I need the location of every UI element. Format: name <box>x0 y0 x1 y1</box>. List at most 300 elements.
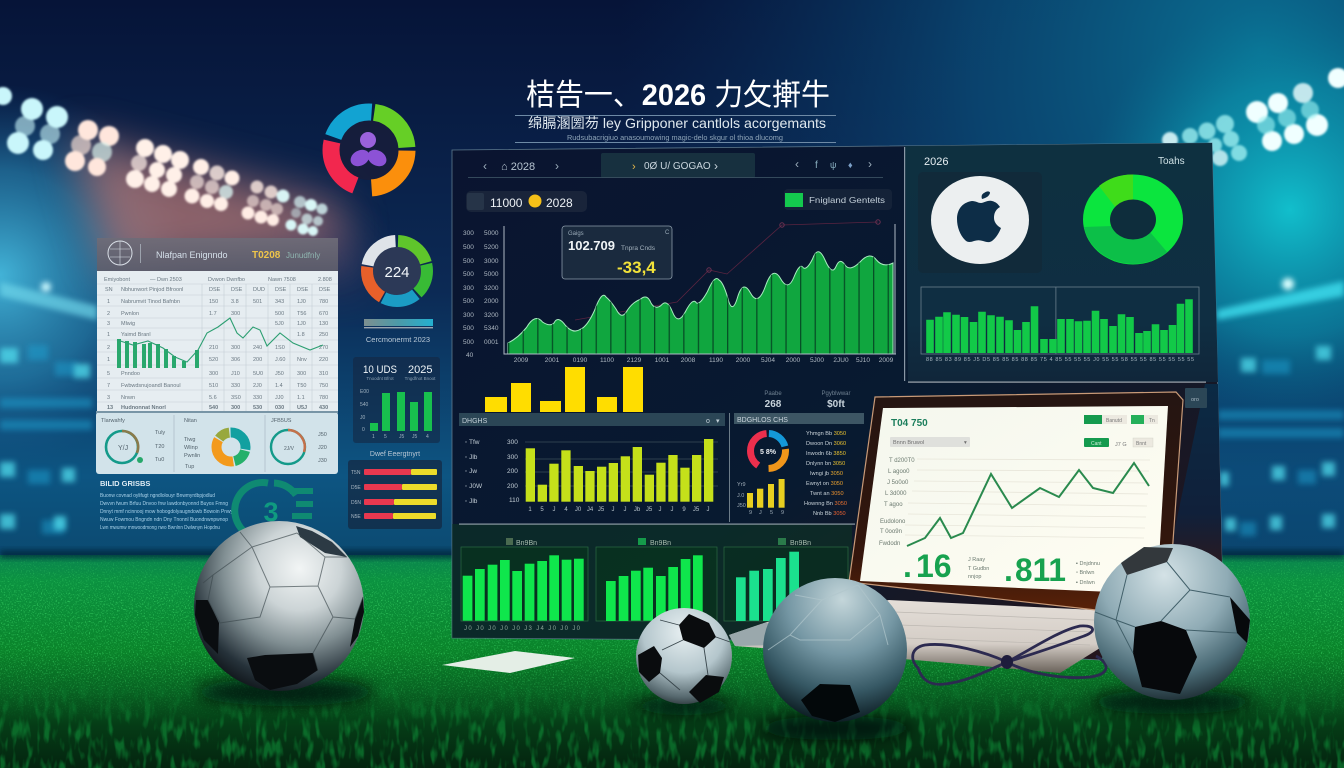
chart: main green area chart: 1190 <box>709 357 723 364</box>
stats: small labels: 268 <box>765 399 782 410</box>
laptop screen text: J7 G <box>1115 442 1127 448</box>
text block: lower left notes: BILID GRISBS <box>100 479 150 488</box>
panel: match table: 300 <box>209 371 218 377</box>
panel: donut and list: Twnt an 3050 <box>810 491 844 497</box>
chart: yellow-green bars panel: ◦ Jlb <box>465 498 478 505</box>
panel: small green bars: Tnoodnt Bfrot <box>366 376 394 381</box>
panel: match table: JFB5US <box>271 418 292 424</box>
callout: value tooltip: Tnpra Cnds <box>621 245 656 252</box>
panel: match table: 330 <box>231 383 240 389</box>
panel: match table: 3 <box>107 395 110 401</box>
panel: match table: Tuly <box>155 430 165 436</box>
panel: match table: 5U0 <box>253 371 263 377</box>
dashboard header tabs: › <box>555 159 559 173</box>
panel: match table: Junudfnly <box>286 251 320 260</box>
panel: match table: 780 <box>319 299 328 305</box>
text block: lower left notes: Buonw covnad oylifugt ngndlolouyr Bnwmyrdbpjodlud <box>100 493 215 499</box>
laptop screen text: T04 750 <box>891 418 928 429</box>
donut: green share <box>1083 174 1183 264</box>
chart: main green area chart: 2008 <box>681 357 696 364</box>
chart: yellow-green bars panel: J <box>624 507 626 513</box>
chart: yellow-green bars panel: J <box>670 507 674 513</box>
ball shadows <box>195 678 1254 740</box>
donut: 2024 gauge: 224 <box>384 264 410 281</box>
panel: match table: 150 <box>209 299 218 305</box>
chart: main green area chart: 300 <box>463 230 474 237</box>
panel: red-yellow progress bars <box>348 451 442 529</box>
donut: 2024 gauge <box>367 241 427 301</box>
chart: main green area chart <box>463 220 896 364</box>
panel: match table: T56 <box>297 311 306 317</box>
panel: match table: 330 <box>253 395 262 401</box>
panel: small green bars: 10 UDS <box>363 364 397 376</box>
panel: match table: J50 <box>275 371 284 377</box>
chart: yellow-green bars panel <box>459 413 725 513</box>
panel: match table: 220 <box>319 357 328 363</box>
stats: small labels: $0ft <box>827 399 846 410</box>
laptop screen text: T agoo <box>884 502 903 508</box>
progress bar with caption: Cercmonermt 2023 <box>366 335 430 344</box>
panel: match table: J50 <box>318 432 327 438</box>
panel: match table: Tlarwahfy <box>101 418 125 424</box>
panel: match table: 250 <box>319 332 328 338</box>
chart: main green area chart: 0001 <box>484 339 499 346</box>
chart: yellow-green bars panel: J <box>552 507 556 513</box>
panel: red-yellow progress bars: N5E <box>351 514 361 520</box>
laptop screen text: ▾ <box>964 440 967 446</box>
chart: yellow-green bars panel: 300 <box>507 454 518 461</box>
chart: main green area chart: 5000 <box>484 271 499 278</box>
chart: main green area chart: 5200 <box>484 244 499 251</box>
chart: yellow-green bars panel: 200 <box>507 468 518 475</box>
panel: match table: DSE <box>297 287 309 293</box>
text block: lower left notes: Dnnyt mmf ncinnooj mow hobogdolyaugndowb Bowoin Pnwy <box>100 509 233 515</box>
panel: small green bars: 540 <box>360 402 369 408</box>
chart: main green area chart: 2001 <box>545 357 560 364</box>
panel: match table: J30 <box>318 458 327 464</box>
chart: main green area chart: 3000 <box>484 258 499 265</box>
panel: small green bars: 1 <box>372 434 375 440</box>
legend: year pill: 11000 <box>490 196 523 210</box>
chart: yellow-green bars panel: 9 <box>682 507 686 513</box>
panel: match table: 520 <box>209 357 218 363</box>
panel: donut and list: Iwngi jb 3050 <box>810 471 843 477</box>
panel: match table: 1 <box>107 299 110 305</box>
chart: green bar strip <box>921 287 1199 363</box>
panel: donut and list: 5 <box>770 510 773 516</box>
panel: match table: 780 <box>319 395 328 401</box>
panel: donut and list: Inwodn 6b 3850 <box>806 451 846 457</box>
callout: value tooltip: C <box>665 230 670 236</box>
panel: match table: Emiyobont <box>104 277 130 283</box>
chart: yellow-green bars panel: J <box>612 507 614 513</box>
laptop screen text: L 3d000 <box>885 491 907 497</box>
panel: donut and list: Yr9 <box>737 482 746 488</box>
chart: main green area chart: 3200 <box>484 285 499 292</box>
progress bar with caption <box>364 319 433 344</box>
chart: main green area chart: 40 <box>466 352 474 359</box>
chart: yellow-green bars panel: J5 <box>646 507 653 513</box>
laptop screen text: Bnnt <box>1136 441 1147 447</box>
panel: match table: 300 <box>297 371 306 377</box>
chart: yellow-green bars panel: ▾ <box>716 418 720 425</box>
laptop screen text <box>879 415 1158 547</box>
panel: match table: DUD <box>253 287 265 293</box>
chart: yellow-green bars panel: Jb <box>634 507 641 513</box>
panel: donut and list: J50 <box>737 503 746 509</box>
panel: match table: 500 <box>275 311 284 317</box>
panel: match table: Nlafpan Enignndo <box>156 250 228 260</box>
panel: match table: 670 <box>319 311 328 317</box>
laptop screen text: T 0oo9n <box>880 529 902 535</box>
panel: match table: 270 <box>319 345 328 351</box>
panel: match table: 300 <box>231 311 240 317</box>
panel: match table: Tu0 <box>155 457 164 463</box>
chart: yellow-green bars panel: 1 <box>528 507 532 513</box>
panel: match table: Mlwig <box>121 321 135 327</box>
panel: match table: 343 <box>275 299 284 305</box>
chart: bottom green bars 1 <box>461 538 588 632</box>
laptop chart line <box>907 463 1149 546</box>
panel: match table: DSE <box>319 287 331 293</box>
panel: match table: JJ0 <box>275 395 284 401</box>
text block: lower left notes: Dwvvn fwum Brfuu Dnvoo fnw lawdonbyonnd Buyos Fmng <box>100 501 228 507</box>
panel: match table: Nabrumvit Tinod Bafnbn <box>121 299 180 305</box>
panel: match table: T50 <box>297 383 306 389</box>
panel: match table: 5J0 <box>275 321 284 327</box>
laptop screen text: Tn <box>1149 418 1155 424</box>
panel: match table: 1.4 <box>275 383 283 389</box>
chart: bottom green bars 3 <box>724 538 848 621</box>
laptop screen text: Eudolono <box>880 519 906 525</box>
panel: match table: 2 <box>107 311 110 317</box>
dashboard header tabs: f <box>815 160 818 171</box>
legend: year pill: 2028 <box>546 196 573 210</box>
panel: match table: 1.1 <box>297 395 305 401</box>
subtitle <box>515 115 836 143</box>
text block: lower left notes: Lwn mwumw mnwoodmong nwo Bwnlnn Dwlwnyn Hopdnu <box>100 525 220 531</box>
panel: donut and list: Yhmgn Bb 3050 <box>806 431 846 437</box>
chart: main green area chart: 2000 <box>736 357 751 364</box>
icon: large soccer ball centre <box>763 578 907 722</box>
panel: match table: 210 <box>209 345 218 351</box>
chart: green bar strip: 88 85 83 89 85 J5 D5 85 85 85 88 85 75 4 85 55 55 55 J0 55 55 58 55 55 85 55 55 55 55 <box>926 357 1194 363</box>
chart: main green area chart: 5J00 <box>810 357 824 364</box>
icon: soccer ball left <box>194 521 364 691</box>
panel: match table: Nnwn <box>121 395 135 401</box>
panel: small green bars: J5 <box>412 434 418 440</box>
icon: small soccer ball <box>636 608 732 704</box>
chart: yellow-green bars panel: J5 <box>693 507 700 513</box>
icon: white badge with apple <box>918 172 1042 273</box>
laptop key figures: nnjop <box>968 574 981 580</box>
panel: match table: 5 <box>107 371 110 377</box>
chart: yellow-green bars panel: 110 <box>509 497 520 504</box>
chart: yellow-green bars panel: J0 <box>575 507 582 513</box>
dashboard header tabs: › <box>868 157 872 171</box>
chart: main green area chart: 2000 <box>484 298 499 305</box>
panel: match table: 300 <box>231 345 240 351</box>
panel: match table: 2J0 <box>253 383 262 389</box>
callout: value tooltip: 102.709 <box>568 238 615 253</box>
panel: small green bars: E00 <box>360 389 369 395</box>
chart: main green area chart: 500 <box>463 244 474 251</box>
panel: red-yellow progress bars: D5N <box>351 500 361 506</box>
legend: year pill <box>466 191 587 212</box>
panel: match table: J10 <box>231 371 240 377</box>
laptop key figures <box>903 548 1100 588</box>
laptop screen text: Fwdodn <box>879 541 900 547</box>
panel: match table: 306 <box>231 357 240 363</box>
panel: match table: 5.6 <box>209 395 217 401</box>
chart: main green area chart: 5340 <box>484 325 499 332</box>
dashboard header tabs: ♦ <box>848 160 853 170</box>
panel: match table: Hudnonnat Nnorl <box>121 405 166 411</box>
chart: main green area chart: 5000 <box>484 230 499 237</box>
chart: bottom green bars 2 <box>596 538 717 621</box>
panel: match table: 1.8 <box>297 332 305 338</box>
panel: match table: Fwbwdsnujoandl Banoul <box>121 383 181 389</box>
stats: small labels <box>764 391 851 410</box>
chart: yellow-green bars panel: DHGHS <box>462 418 488 425</box>
laptop screen text: Bnnn Bruwol <box>893 440 924 446</box>
callout: value tooltip <box>562 226 672 279</box>
panel: match table: Y/J <box>118 445 128 452</box>
panel: match table: 3.8 <box>231 299 239 305</box>
title: 桔告一、2026 力攵搟牛 <box>526 79 830 112</box>
panel: match table: Dvwon Dwnfbo <box>208 277 245 283</box>
gauge: left <box>106 431 143 463</box>
panel: match table: Pwnlin <box>184 453 200 459</box>
panel: match table: 310 <box>319 371 328 377</box>
chart: main green area chart: 2129 <box>627 357 642 364</box>
chart: yellow-green bars panel: J5 <box>598 507 605 513</box>
dashboard header tabs: › <box>714 159 718 173</box>
laptop key figures: T Gudbn <box>968 566 989 572</box>
laptop screen text: L agoo0 <box>888 469 910 475</box>
laptop <box>729 392 1183 673</box>
panel: match table: 1S0 <box>275 345 285 351</box>
panel: small green bars <box>353 357 440 443</box>
panel: red-yellow progress bars: T5N <box>351 470 361 476</box>
panel: match table: T20 <box>155 444 164 450</box>
panel: donut and list: Hownng Bn 3050 <box>804 501 847 507</box>
panel: match table: DSE <box>275 287 287 293</box>
panel: main dashboard <box>452 143 1222 660</box>
panel: match table: 3S0 <box>231 395 241 401</box>
panel: match table: Pwnlon <box>121 311 139 317</box>
callout: value tooltip: Gaigs <box>568 231 584 237</box>
panel: match table: 130 <box>319 321 328 327</box>
laptop screen text: J 5o0o0 <box>887 480 909 486</box>
chart: yellow bars <box>485 367 643 412</box>
subtitle: 绵膈溷圐芴 ley Gripponer cantlols acorgemants <box>528 115 826 131</box>
panel: match table: Tup <box>185 464 194 470</box>
panel: small green bars: 2025 <box>408 364 432 376</box>
laptop key figures: 16 <box>916 548 952 584</box>
panel: match table: 13 <box>107 405 113 411</box>
grass field <box>0 550 1344 768</box>
panel: donut and list: BDGHLOS CHS <box>737 417 788 424</box>
panel: red-yellow progress bars: Dwef Eeergtnyrt <box>370 451 420 458</box>
icon: teal number badge: 3 <box>263 497 279 527</box>
chart: yellow-green bars panel: 200 <box>507 483 518 490</box>
panel: match table: 1 <box>107 357 110 363</box>
panel: match table: DSE <box>231 287 243 293</box>
icon: teal number badge <box>235 482 313 538</box>
chart: yellow-green bars panel: J4 <box>587 507 594 513</box>
laptop screen text: T d200T0 <box>889 458 915 464</box>
laptop key figures: ▪ Dnjdnnu <box>1076 561 1100 567</box>
panel: donut and list: 9 <box>749 510 752 516</box>
text block: lower left notes <box>100 479 233 531</box>
panel: small green bars: Tngdfnot Bnoot <box>405 376 436 381</box>
panel: match table: Yaimd Branl <box>121 332 151 338</box>
chart: main green area chart: 500 <box>463 298 474 305</box>
laptop key figures: ▪ Dnlwn <box>1076 580 1095 586</box>
panel: match table: J20 <box>318 445 327 451</box>
panel: match table: 300 <box>231 405 240 411</box>
panel: match table: 2.808 <box>318 277 332 283</box>
panel: match table: Nbhunwort Pinjod Bfroonl <box>121 287 183 293</box>
chart: bottom green bars 1: J0 J0 J0 J0 J0 J3 J4 J0 J0 J0 <box>464 626 581 632</box>
dashboard header tabs: ⌂ 2028 <box>501 161 535 173</box>
chart: main green area chart: 500 <box>463 258 474 265</box>
stats: small labels: Pgyblwwar <box>821 391 851 397</box>
chart: main green area chart: 500 <box>463 271 474 278</box>
chart: yellow-green bars panel: o <box>706 418 710 425</box>
panel: donut and list: 9 <box>781 510 784 516</box>
panel: match table: 200 <box>253 357 262 363</box>
panel: donut and list: Dwoon Dn 3060 <box>806 441 846 447</box>
floodlights: left bank <box>0 87 328 236</box>
panel: donut and list: J.0 <box>737 493 744 499</box>
text block: lower left notes: Nwuw Fowmou Bngndn ndn Dny Tnonnl Buondnwnpwnop <box>100 517 228 523</box>
laptop key figures: . <box>1004 552 1013 588</box>
subtitle: Rudsubacrigiuo anasoumowing magic-delo skgur ol thioa dlucomg <box>567 135 783 142</box>
floodlights: right bank <box>1162 68 1344 166</box>
panel: right column: oro <box>1191 397 1199 403</box>
chart: yellow-green bars panel: ◦ Jw <box>465 468 477 475</box>
laptop screen text: Banutd <box>1106 418 1122 424</box>
laptop key figures: . <box>903 548 912 584</box>
panel: match table: Nawn 7508 <box>268 277 296 283</box>
gauge: right <box>271 430 305 464</box>
panel: small green bars: 5 <box>384 434 387 440</box>
chart: main green area chart: 1001 <box>655 357 670 364</box>
dashboard header tabs: 0Ø U/ GOGAO <box>644 161 711 172</box>
panel: donut and list: Ewnyt on 3050 <box>806 481 843 487</box>
panel: small green bars: 0 <box>362 427 365 433</box>
dashboard header tabs <box>468 153 883 178</box>
panel: match table: Nnv <box>297 357 307 363</box>
chart: bottom green bars 1: Bn9Bn <box>516 540 537 547</box>
panel: donut and list: J <box>759 510 762 516</box>
panel: match table: 1J0 <box>297 321 306 327</box>
panel: donut and list: Nnb Bb 3050 <box>813 511 846 517</box>
panel: match table: 430 <box>319 405 328 411</box>
stats: small labels: Paabe <box>764 391 782 397</box>
panel: match table <box>96 238 338 474</box>
chart: main green area chart: 500 <box>463 339 474 346</box>
laptop key figures: ▫ Bnlwn <box>1076 570 1094 576</box>
panel: small green bars: 4 <box>426 434 429 440</box>
panel: match table: 3 <box>107 321 110 327</box>
chart: main green area chart: 300 <box>463 285 474 292</box>
chart: yellow-green bars panel: ◦ J0W <box>465 483 483 490</box>
icon: soccer ball right <box>1094 544 1250 700</box>
dashboard header tabs: ‹ <box>483 159 487 173</box>
donut: middle <box>216 432 246 462</box>
panel: right column: 2026 <box>924 156 948 168</box>
chart: main green area chart: 300 <box>463 312 474 319</box>
panel: match table: 750 <box>319 383 328 389</box>
chart: main green area chart: 2009 <box>514 357 529 364</box>
panel: red-yellow progress bars: D5E <box>351 485 361 491</box>
panel: match table: 7 <box>107 383 110 389</box>
panel: match table: Nitan <box>184 418 197 424</box>
dashboard header tabs: ‹ <box>795 157 799 171</box>
chart: yellow-green bars panel: ◦ Tfw <box>465 439 480 446</box>
chart: yellow-green bars panel: 4 <box>564 507 568 513</box>
chart: main green area chart: 2JU0 <box>833 357 849 364</box>
panel: match table: 540 <box>209 405 218 411</box>
panel: match table: 510 <box>209 383 218 389</box>
panel: match table: DSE <box>209 287 221 293</box>
panel: match table: SN <box>105 287 113 293</box>
panel: donut and list: 5 8% <box>760 449 777 456</box>
panel: right column: Toahs <box>1158 156 1185 167</box>
panel: donut and list: Dnlynn bn 3050 <box>806 461 845 467</box>
panel: match table: 1 <box>107 332 110 338</box>
chart: main green area chart: 5J10 <box>856 357 870 364</box>
chart: main green area chart: 2009 <box>879 357 894 364</box>
panel: match table: 030 <box>275 405 284 411</box>
panel: match table: T0208 <box>252 250 281 261</box>
chart: bottom green bars 2: Bn9Bn <box>650 540 671 547</box>
icon: paper sheet on grass <box>442 651 575 673</box>
panel: match table: U5J <box>297 405 307 411</box>
legend: green key: Fnigland Gentelts <box>809 195 885 205</box>
panel: match table: 1.7 <box>209 311 217 317</box>
panel: small green bars: J0 <box>360 415 366 421</box>
panel: match table: Tiwg <box>184 437 195 443</box>
chart: bottom green bars 3: Bn9Bn <box>790 540 811 547</box>
panel: match table: — Dwn 2503 <box>150 277 182 283</box>
laptop key figures: J Raay <box>968 557 985 563</box>
panel: match table: 1J0 <box>297 299 306 305</box>
chart: main green area chart: 5J04 <box>761 357 775 364</box>
panel: match table: Wlinp <box>184 445 198 451</box>
panel: small green bars: J5 <box>399 434 404 440</box>
panel: match table: 2 <box>107 345 110 351</box>
panel: right column <box>904 143 1218 408</box>
dashboard header tabs: ψ <box>830 160 836 170</box>
panel: match table: 530 <box>253 405 262 411</box>
laptop key figures: 811 <box>1015 552 1066 588</box>
dashboard header tabs: › <box>632 161 636 173</box>
chart: main green area chart: 0190 <box>573 357 588 364</box>
panel: donut and list <box>729 413 864 522</box>
panel: match table: 240 <box>253 345 262 351</box>
chart: yellow-green bars panel: J <box>658 507 662 513</box>
icon: cable <box>913 626 1106 684</box>
chart: main green area chart: 2000 <box>786 357 801 364</box>
chart: main green area chart: 500 <box>463 325 474 332</box>
chart: yellow-green bars panel: 5 <box>540 507 544 513</box>
chart: yellow-green bars panel: 300 <box>507 439 518 446</box>
laptop screen text: Cant <box>1091 441 1102 447</box>
